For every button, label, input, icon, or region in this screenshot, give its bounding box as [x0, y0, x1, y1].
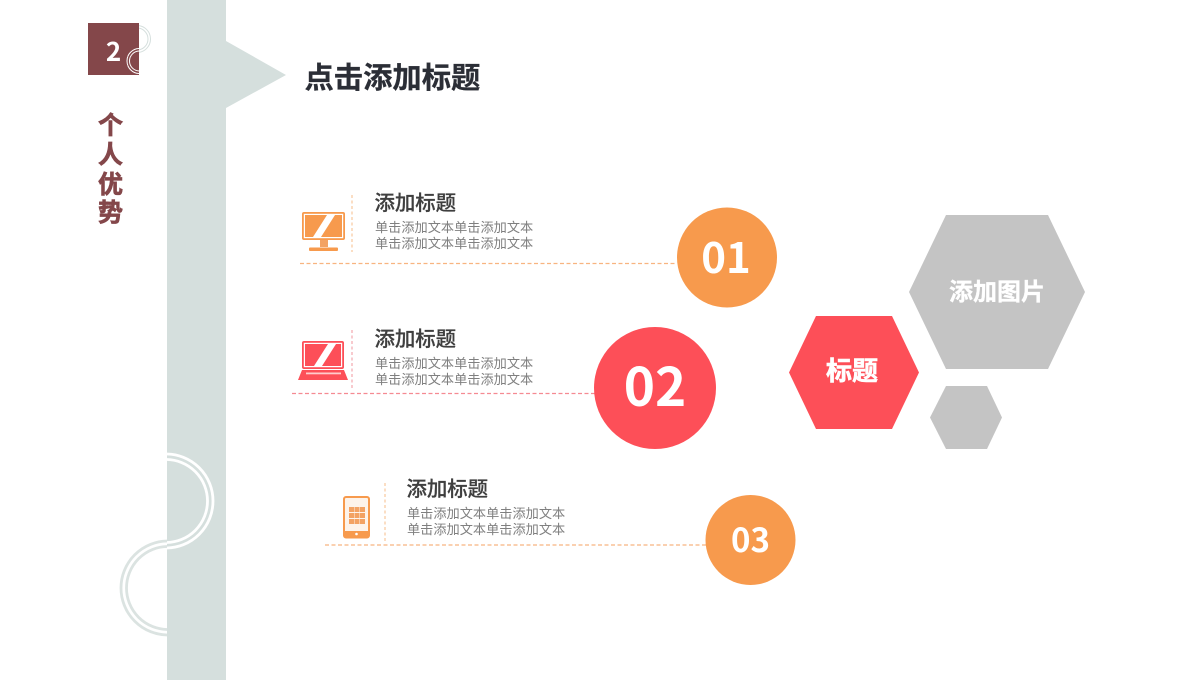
hexagon: image placeholder: 添加图片 [949, 279, 1045, 306]
item 02 [292, 327, 716, 449]
number circle 01 [677, 208, 777, 308]
section number badge [88, 23, 152, 75]
text block [374, 192, 533, 251]
text block: 单击添加文本单击添加文本 [375, 356, 533, 371]
vertical divider [384, 483, 386, 541]
hexagon: title: 标题 [826, 356, 878, 386]
vertical section title: 人 [98, 141, 123, 169]
decorative rings on side bar [119, 454, 215, 635]
text block: 单击添加文本单击添加文本 [375, 236, 533, 251]
item 03 [325, 478, 796, 585]
section number badge: 2 [106, 32, 121, 69]
main title: 点击添加标题 [304, 62, 480, 95]
icon: tablet [344, 497, 369, 538]
icon: desktop monitor [302, 212, 345, 251]
text block: 单击添加文本单击添加文本 [407, 522, 565, 537]
vertical section title: 优 [98, 171, 123, 199]
vertical section title: 势 [98, 199, 123, 227]
text block [406, 478, 565, 537]
vertical section title [98, 112, 123, 227]
hexagon: image placeholder [909, 215, 1085, 369]
text block: 添加标题 [374, 328, 456, 351]
text block: 单击添加文本单击添加文本 [407, 506, 565, 521]
dashed leader [325, 544, 706, 546]
number circle 02 [594, 327, 716, 449]
side bar with pointer [167, 0, 286, 680]
vertical section title: 个 [98, 112, 123, 140]
number circle 03 [706, 495, 796, 585]
text block: 单击添加文本单击添加文本 [375, 220, 533, 235]
number circle 01: 01 [701, 225, 751, 286]
icon: laptop [298, 341, 348, 380]
item 01 [300, 192, 777, 308]
vertical divider [351, 195, 353, 252]
dashed leader [292, 392, 595, 394]
number circle 03: 03 [731, 514, 770, 562]
text block [374, 328, 533, 387]
dashed leader [300, 262, 677, 264]
text block: 添加标题 [374, 192, 456, 215]
text block: 单击添加文本单击添加文本 [375, 372, 533, 387]
hexagon: small decorative [930, 386, 1002, 449]
hexagon: title [789, 316, 919, 429]
text block: 添加标题 [406, 478, 488, 501]
vertical divider [351, 330, 353, 388]
number circle 02: 02 [624, 346, 686, 422]
